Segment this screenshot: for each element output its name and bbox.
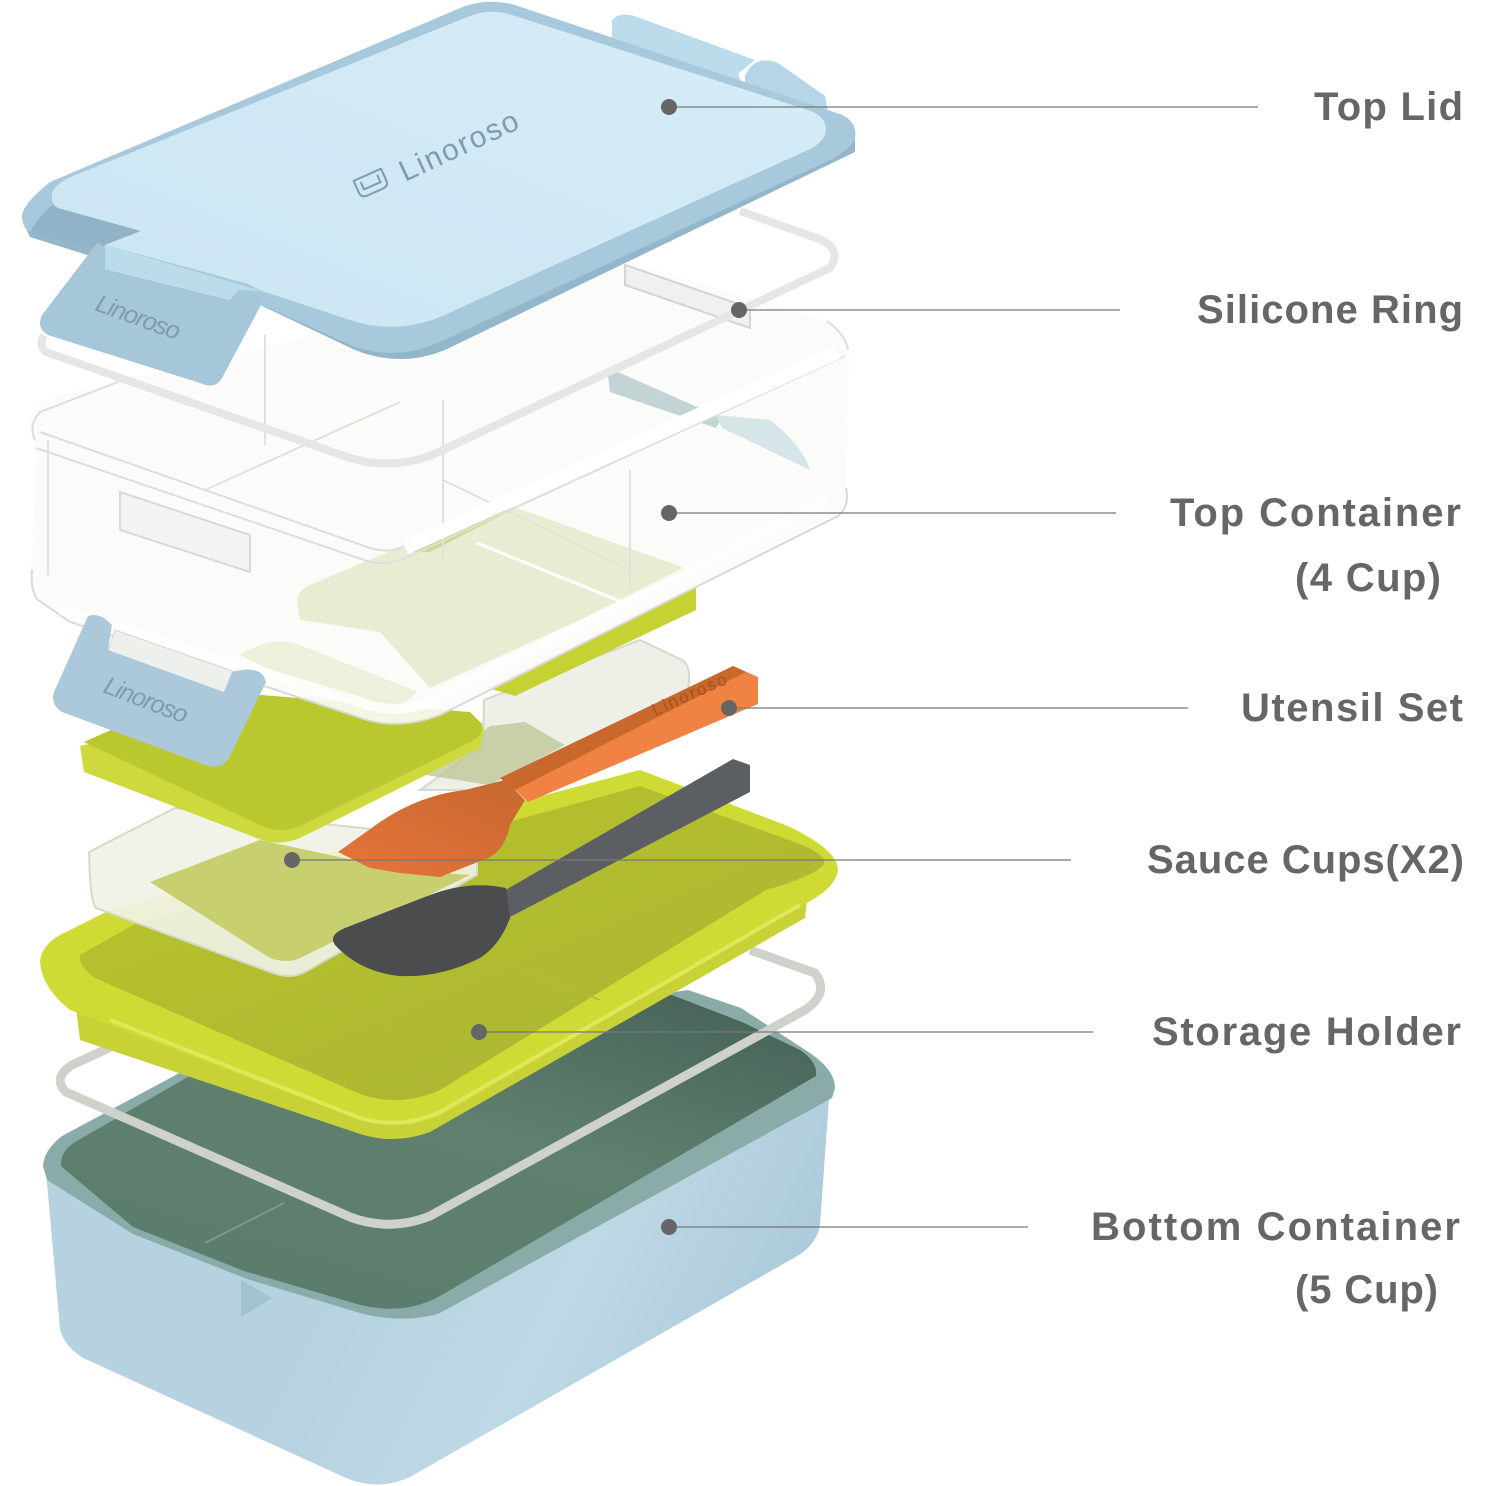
left rim shadow <box>30 205 141 250</box>
dot: top container <box>661 505 677 521</box>
spoon <box>333 759 750 976</box>
upper silicone ring <box>41 211 834 464</box>
holder base <box>75 890 808 1139</box>
dot: sauce cups <box>284 852 300 868</box>
knife <box>608 372 810 470</box>
label: (4 Cup): (4 Cup) <box>1295 556 1441 600</box>
clip brand: Linoroso <box>92 289 184 346</box>
line: top container <box>669 512 1116 514</box>
interior divider line <box>205 1203 284 1243</box>
spork brand: Linoroso <box>649 670 730 720</box>
label: Utensil Set: Utensil Set <box>1241 686 1463 730</box>
lid top <box>84 690 482 830</box>
green sauce cup lid <box>80 690 484 843</box>
base rim <box>32 488 847 724</box>
clip body <box>40 243 261 386</box>
front rim band <box>405 352 838 548</box>
container rim <box>43 990 835 1319</box>
dot: utensil set <box>721 700 737 716</box>
spork head <box>338 780 525 877</box>
lid logo <box>354 169 389 198</box>
lid side <box>80 700 484 843</box>
lower sauce cup <box>89 808 477 976</box>
knife blade <box>716 415 810 470</box>
lid brand: Linoroso <box>394 104 524 188</box>
holder interior <box>80 786 824 1100</box>
tinted compartment small <box>240 642 418 710</box>
bottom container <box>43 990 835 1484</box>
clip hinge detail <box>105 630 235 700</box>
side clip fin <box>241 1280 272 1317</box>
spork handle <box>510 666 758 802</box>
lower silicone ring <box>60 950 821 1224</box>
base rim inner band <box>60 500 828 709</box>
back clip knob <box>745 60 828 112</box>
holder compartment lines <box>240 960 600 1025</box>
back clip bar <box>612 14 755 90</box>
lid rim <box>22 2 855 353</box>
label: Bottom Container: Bottom Container <box>1091 1205 1460 1249</box>
front hinge <box>120 492 250 572</box>
dot: bottom container <box>661 1219 677 1235</box>
spoon bowl <box>333 885 510 976</box>
bright green strip under container <box>488 588 696 696</box>
leader lines <box>292 107 1258 1227</box>
compartment highlight <box>477 543 627 604</box>
label: Top Container: Top Container <box>1170 491 1461 535</box>
container body <box>46 1085 830 1484</box>
line: storage holder <box>479 1031 1093 1033</box>
front clip <box>40 243 262 386</box>
storage holder <box>40 770 838 1139</box>
label: Sauce Cups(X2): Sauce Cups(X2) <box>1147 838 1464 882</box>
line: sauce cups <box>292 859 1071 861</box>
dot: storage holder <box>471 1024 487 1040</box>
leader dots <box>284 99 747 1235</box>
cup inner well <box>425 722 565 785</box>
line: utensil set <box>729 707 1188 709</box>
clip hinge band <box>105 245 262 300</box>
label: Storage Holder: Storage Holder <box>1152 1010 1461 1054</box>
lid lower rim <box>22 135 855 359</box>
line: bottom container <box>669 1226 1028 1228</box>
knife handle <box>608 372 722 428</box>
dot: silicone ring <box>731 302 747 318</box>
tinted compartment <box>297 503 690 688</box>
label: Top Lid: Top Lid <box>1314 85 1463 129</box>
spoon handle <box>502 759 750 918</box>
lid top surface <box>52 12 826 327</box>
holder rim <box>40 770 838 1125</box>
dot: top lid <box>661 99 677 115</box>
lower clip <box>53 615 266 767</box>
spork handle top face <box>500 666 746 790</box>
label: (5 Cup): (5 Cup) <box>1295 1268 1438 1312</box>
utensil set <box>333 666 758 976</box>
line: silicone ring <box>739 309 1120 311</box>
clip body <box>53 615 266 767</box>
logo mark <box>354 169 389 198</box>
container interior <box>61 995 816 1309</box>
inner walls <box>48 335 630 590</box>
back clip <box>612 14 828 112</box>
holder bottom edge highlight <box>110 905 800 1123</box>
top container <box>29 262 849 724</box>
clip brand: Linoroso <box>100 671 192 729</box>
cup inner well <box>150 840 470 961</box>
upper sauce cup <box>420 640 689 790</box>
green sliver behind rim <box>405 506 512 552</box>
top lid <box>22 2 855 386</box>
container shell <box>29 262 849 724</box>
label: Silicone Ring: Silicone Ring <box>1197 288 1463 332</box>
cup shell <box>420 640 689 790</box>
line: top lid <box>669 106 1258 108</box>
back hinge <box>625 265 750 328</box>
cup shell <box>89 808 477 976</box>
spork <box>338 666 758 877</box>
top rim <box>32 321 848 563</box>
